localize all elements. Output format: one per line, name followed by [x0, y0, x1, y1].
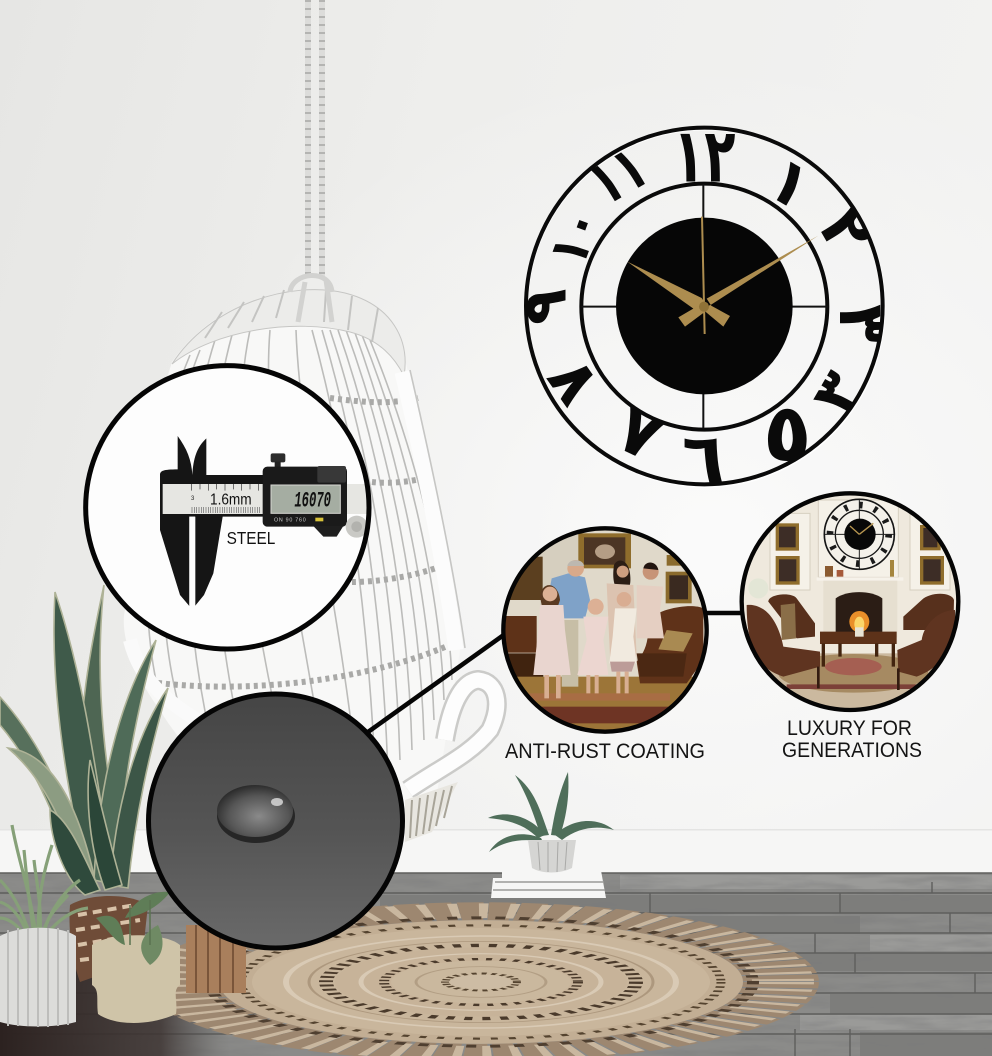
connector: droplet to family circle	[368, 634, 505, 732]
family photo circle	[500, 527, 710, 733]
anti-rust droplet circle	[148, 694, 402, 948]
black circle border	[86, 366, 369, 649]
scale tick number: 3	[191, 496, 195, 502]
numerals	[510, 113, 899, 500]
label: luxury for generations: GENERATIONS	[782, 739, 922, 762]
numerals: ٩	[510, 288, 580, 325]
potted plant leaves	[488, 772, 614, 852]
numerals: ١	[755, 141, 826, 224]
white circle background	[86, 366, 369, 649]
small plant on books	[488, 772, 614, 898]
black centre disc	[616, 218, 793, 394]
chair shell	[124, 291, 460, 840]
luxury room circle	[740, 493, 960, 710]
woven strands	[147, 330, 452, 800]
numerals: ٦	[682, 418, 725, 500]
wicker pot	[69, 896, 148, 982]
numerals: ٨	[533, 344, 616, 418]
coated metal surface	[148, 694, 402, 948]
bamboo pot	[186, 925, 246, 993]
label: luxury for generations	[782, 717, 922, 762]
rug	[179, 911, 783, 1053]
numerals: ١٢	[673, 113, 735, 200]
rug fringe	[181, 911, 781, 1053]
label: anti-rust coating: ANTI-RUST COATING	[505, 740, 705, 763]
snake plant	[0, 585, 168, 982]
caliper buttons text: ON 90 760	[274, 518, 306, 524]
spokes	[581, 184, 828, 428]
numerals: ٧	[605, 389, 675, 476]
seat fringe	[405, 782, 458, 842]
grass plant in white ribbed pot	[0, 825, 88, 1027]
connector: family to room circle	[706, 611, 742, 615]
white pot	[0, 928, 76, 1026]
label: luxury for generations: LUXURY FOR	[787, 717, 912, 740]
wooden floor	[0, 873, 992, 1056]
hanging rope	[308, 0, 322, 278]
droplet shadow	[217, 789, 295, 843]
ceramic pot	[528, 840, 576, 872]
steel label: STEEL	[227, 528, 275, 548]
digital caliper	[160, 436, 373, 606]
family photo and room circles	[500, 493, 960, 733]
numerals: ٥	[763, 386, 812, 479]
beaded rows	[150, 398, 452, 687]
leaves	[79, 585, 124, 885]
left frame tube	[130, 640, 200, 722]
digital display reading: 16070	[294, 489, 331, 514]
rug body	[219, 920, 743, 1044]
top roll wraps	[205, 288, 378, 342]
scale reading: 1.6mm	[210, 491, 252, 508]
clock shadow ring	[527, 129, 884, 486]
numerals: ٣	[798, 360, 877, 427]
numerals: ١٠	[536, 200, 613, 274]
outer ring	[526, 128, 883, 484]
top roll	[172, 290, 405, 376]
metal wall clock	[510, 113, 899, 500]
grass leaves	[0, 825, 88, 935]
gold clock hands	[627, 217, 818, 334]
rope knot	[290, 275, 332, 322]
numerals: ٣	[825, 304, 899, 343]
beige pot	[92, 935, 180, 1023]
numerals: ٢	[804, 195, 887, 266]
beige pot with leafy plant	[92, 892, 180, 1023]
steel thickness callout circle	[86, 366, 373, 649]
white rattan hanging chair	[124, 275, 497, 842]
armrest	[408, 680, 497, 790]
numerals: ١١	[576, 130, 659, 220]
plant leaves	[96, 916, 125, 945]
stacked books	[491, 865, 606, 898]
right frame tube	[402, 372, 456, 650]
inner ring	[581, 184, 827, 430]
water droplet	[217, 785, 293, 837]
droplet highlight	[271, 798, 283, 806]
